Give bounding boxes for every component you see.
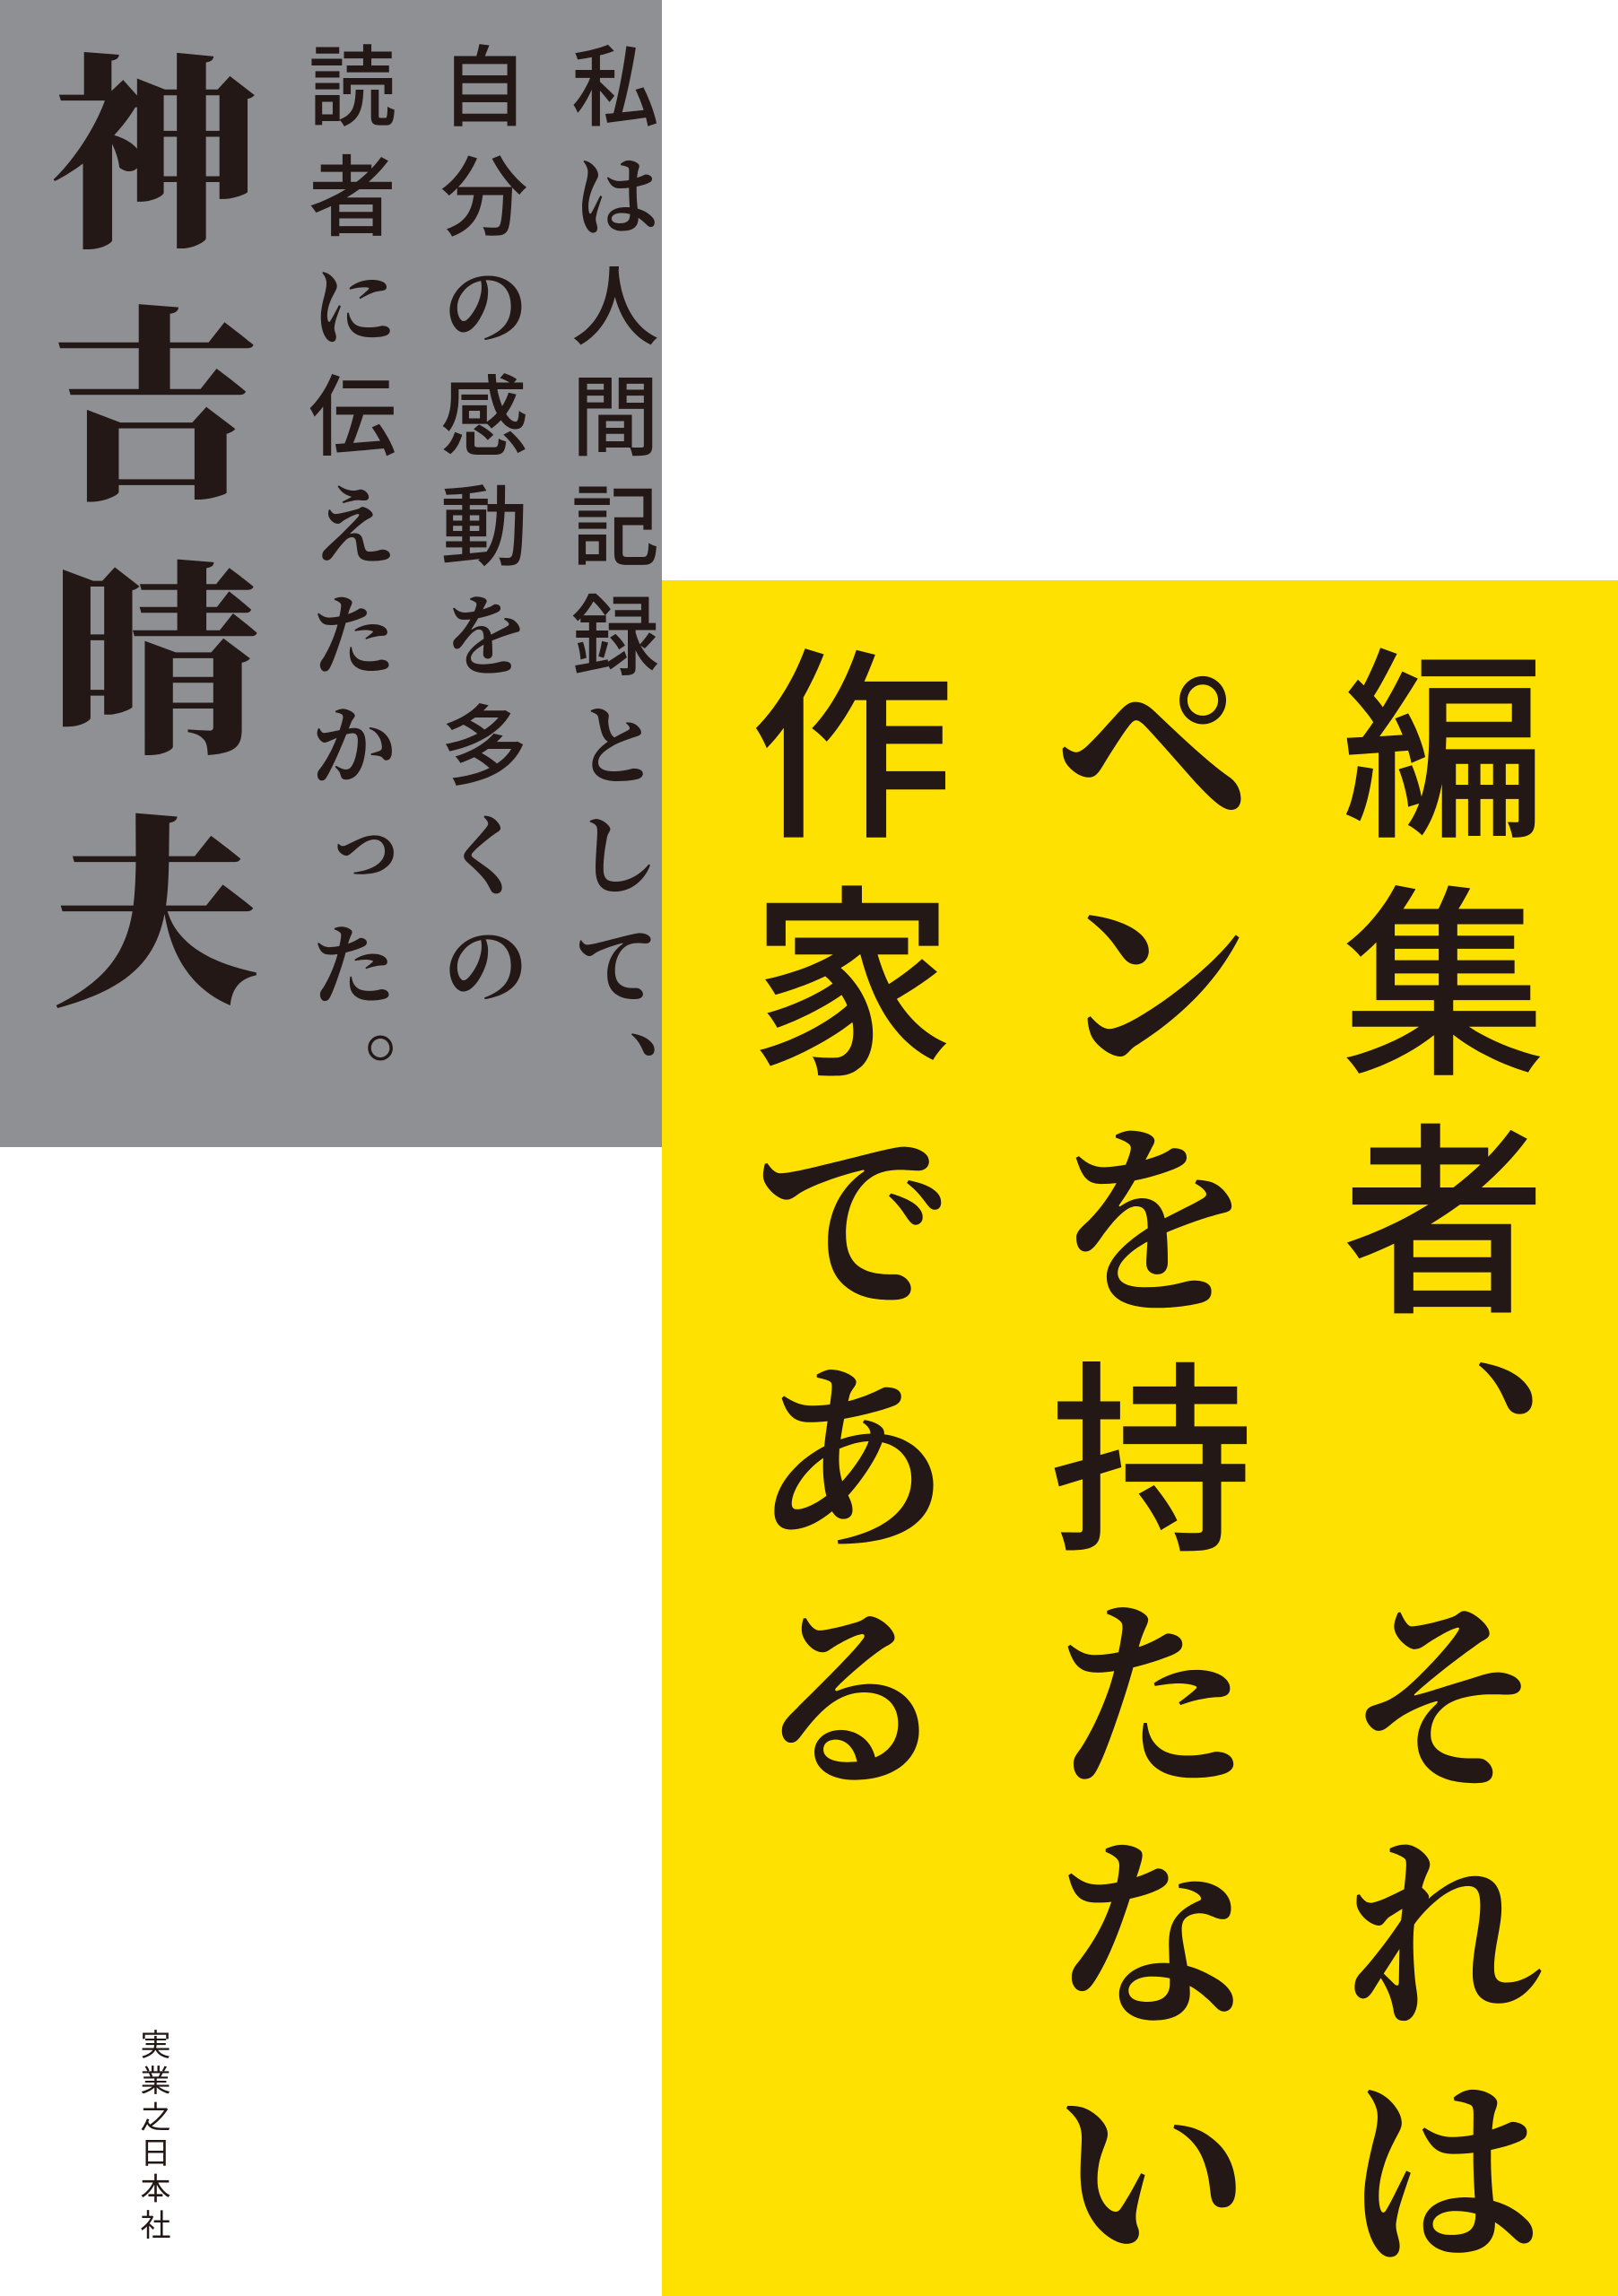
panel: gray author block xyxy=(0,0,662,1147)
title column 1: 編集者 、それは xyxy=(1311,640,1539,2296)
publisher name: 実業之日本社 xyxy=(135,2029,170,2245)
author name: 神吉晴夫 xyxy=(21,47,251,1058)
subtitle column 2: 自分 の 感動 を 多 くの xyxy=(428,41,526,1030)
panel: yellow title block xyxy=(662,580,1618,2296)
subtitle column 1: 私 は 人間記録 として、 xyxy=(559,41,657,1140)
title column 3: 作家 である xyxy=(719,640,947,1830)
title column 2: ペンを 持 たない xyxy=(1019,640,1247,2296)
subtitle column 3: 読者 に 伝 えたかった。 xyxy=(296,41,395,1140)
